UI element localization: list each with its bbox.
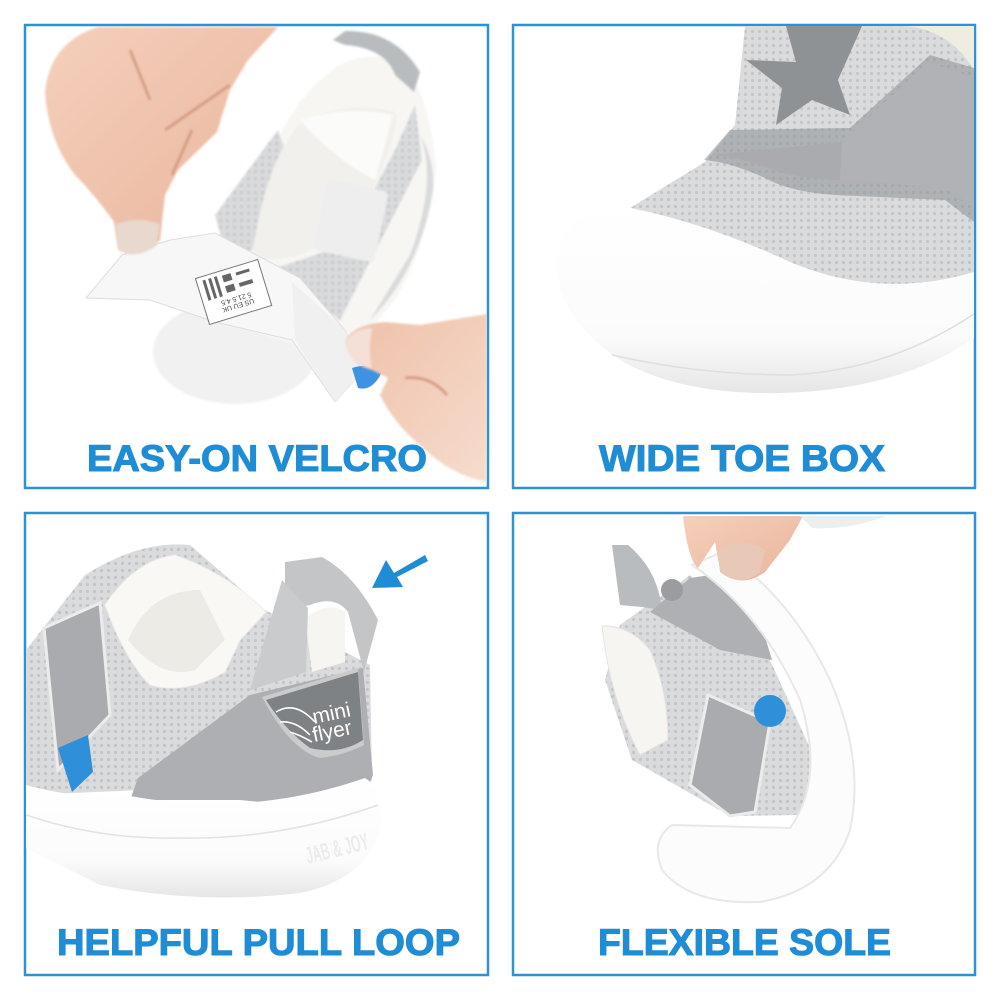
heading: FLEXIBLE SOLE	[598, 922, 891, 963]
text on shoe: mini flyer logo: flyer	[310, 716, 354, 747]
care label: US EU UK	[221, 297, 255, 313]
icon: shoe sole and heel	[153, 31, 436, 404]
icon: shoe upper mesh	[630, 26, 974, 295]
icon: star	[746, 26, 862, 125]
icon: pull loop tab	[250, 557, 378, 690]
text on shoe: mini flyer logo	[276, 702, 350, 744]
heading: EASY-ON VELCRO	[87, 438, 427, 479]
care label	[196, 260, 272, 324]
icon: white sole	[26, 778, 381, 898]
panel: wide toe box	[513, 25, 975, 488]
heading: HELPFUL PULL LOOP	[57, 922, 460, 963]
heading: WIDE TOE BOX	[599, 438, 885, 479]
icon: blue arrow	[372, 555, 428, 588]
icon: shoe body	[26, 544, 373, 812]
icon: fingers	[683, 516, 886, 581]
care label: 5 21.5 4.5	[220, 290, 252, 306]
icon: lower hand	[345, 314, 487, 482]
icon: bent shoe upper	[602, 545, 820, 816]
panel: easy-on velcro	[25, 25, 488, 488]
icon: white sole: JAB & JOY	[303, 828, 372, 870]
text on shoe: mini flyer logo: mini	[310, 698, 353, 729]
panel: flexible sole	[513, 513, 975, 975]
icon: white toe cap sole	[605, 208, 974, 393]
panel: helpful pull loop	[25, 513, 488, 975]
icon: upper hand	[45, 27, 278, 254]
icon: white bent sole	[658, 552, 854, 902]
icon: velcro strap and label	[86, 233, 382, 402]
